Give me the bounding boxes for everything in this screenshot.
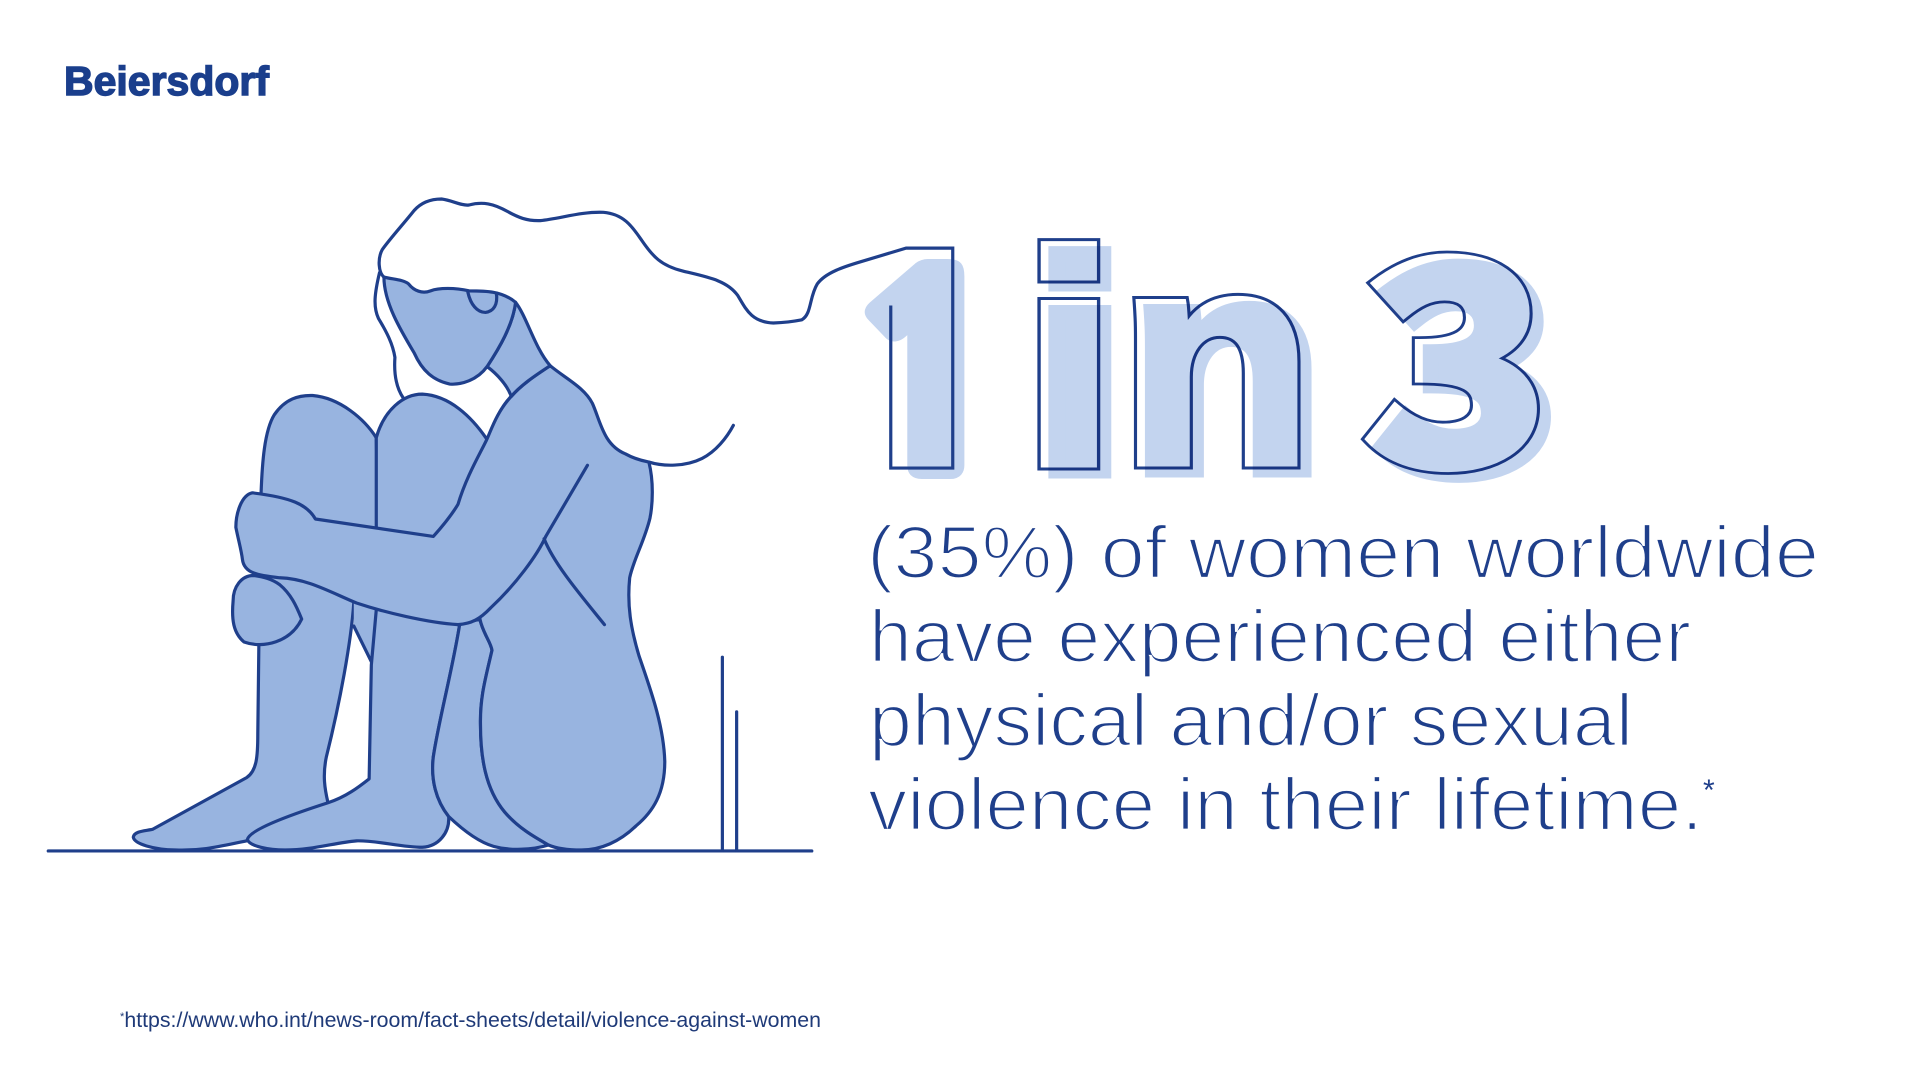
headline outline layer: 3 (1363, 141, 1549, 545)
neck (487, 302, 550, 396)
statement text (867, 511, 1819, 846)
arm and upper hand fill (236, 396, 587, 625)
headline outline layer: n (1120, 192, 1312, 526)
short reed (735, 712, 738, 851)
ground line (48, 849, 812, 853)
line 4: violence in their lifetime. (868, 763, 1703, 846)
lower hand (233, 575, 302, 645)
numeral 1 shadow: 1 (844, 247, 1016, 508)
footnote: * (120, 1011, 125, 1023)
footnote marker on statement: * (1703, 774, 1715, 807)
line 2: have experienced either (869, 595, 1691, 678)
back hair strand (375, 272, 403, 398)
near leg (247, 394, 521, 850)
headline outline layer (1022, 141, 1549, 545)
arm and upper hand outline (236, 396, 587, 625)
flowing hair running into the numeral outline (379, 199, 953, 468)
fill between the legs (354, 601, 380, 665)
illustration: seated woman (48, 199, 953, 851)
hair lower right (649, 425, 733, 465)
headline: 1 in 3 (844, 141, 1560, 553)
torso (480, 366, 665, 850)
headline inner white layer (1022, 141, 1549, 545)
logo: Beiersdorf: Beiersdorf (64, 58, 269, 104)
thigh behind (433, 619, 549, 849)
line 1: (35%) of women worldwide (867, 511, 1819, 594)
headline offset shadow layer (1033, 149, 1560, 553)
ear (468, 292, 497, 312)
tall reed (721, 657, 724, 851)
footnote: https://www.who.int/news-room/fact-sheets/detail/violence-against-women (124, 1009, 821, 1032)
inner calf line (354, 626, 373, 665)
face (384, 277, 516, 384)
headline outline layer: i (1022, 193, 1116, 527)
back line (544, 539, 604, 625)
line 3: physical and/or sexual (869, 679, 1633, 762)
far leg (133, 395, 378, 850)
